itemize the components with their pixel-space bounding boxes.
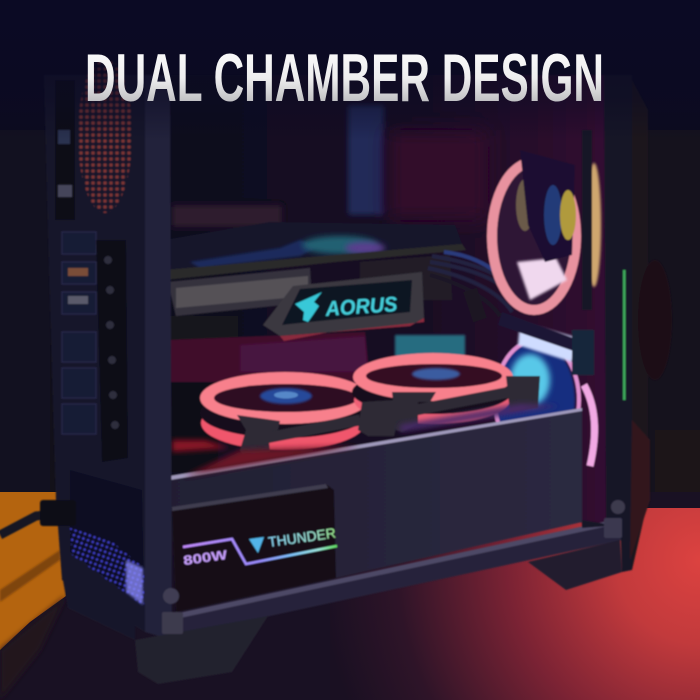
panel: rear panel (44, 57, 145, 632)
panel: bottom fan right (352, 353, 513, 424)
psu rgb line (183, 539, 337, 564)
screws (163, 588, 179, 604)
panel: GPU backplate (165, 222, 466, 340)
fan: far yellow ring (587, 163, 601, 287)
power cables (428, 252, 522, 320)
psu mesh (70, 470, 144, 606)
fan brackets (237, 376, 540, 458)
top pump / bracket (348, 105, 384, 215)
case interior (170, 75, 606, 525)
GPU heatsink fins (168, 268, 312, 316)
power cable (0, 500, 76, 535)
top fade over photo (0, 0, 700, 140)
front panel (632, 80, 648, 570)
table surface (0, 492, 700, 700)
right side fans (492, 130, 601, 466)
front foot (528, 540, 622, 590)
psu wattage label: 800W (182, 547, 229, 568)
slot bracket strip (96, 240, 128, 462)
front pillar (582, 520, 622, 528)
panel: motherboard (168, 332, 465, 472)
icon: aorus eagle logo (295, 292, 322, 322)
io ports (55, 80, 75, 220)
AORUS bracket (263, 272, 424, 341)
icon: thunderx3 logo (249, 537, 264, 553)
aorus logo text: AORUS (324, 293, 398, 321)
panel: bottom fan left (200, 372, 370, 450)
fan: upper rear ring (492, 162, 576, 310)
case bottom rail and frame (62, 75, 672, 684)
lower shelf front chamber (170, 404, 582, 578)
rear foot (135, 616, 268, 684)
thunderx3 brand label: THUNDER (267, 525, 337, 550)
fan: lower rear blue ring (495, 340, 575, 460)
rear fan mesh (78, 57, 132, 213)
expansion slots (62, 232, 96, 434)
panel: PSU (172, 484, 337, 612)
